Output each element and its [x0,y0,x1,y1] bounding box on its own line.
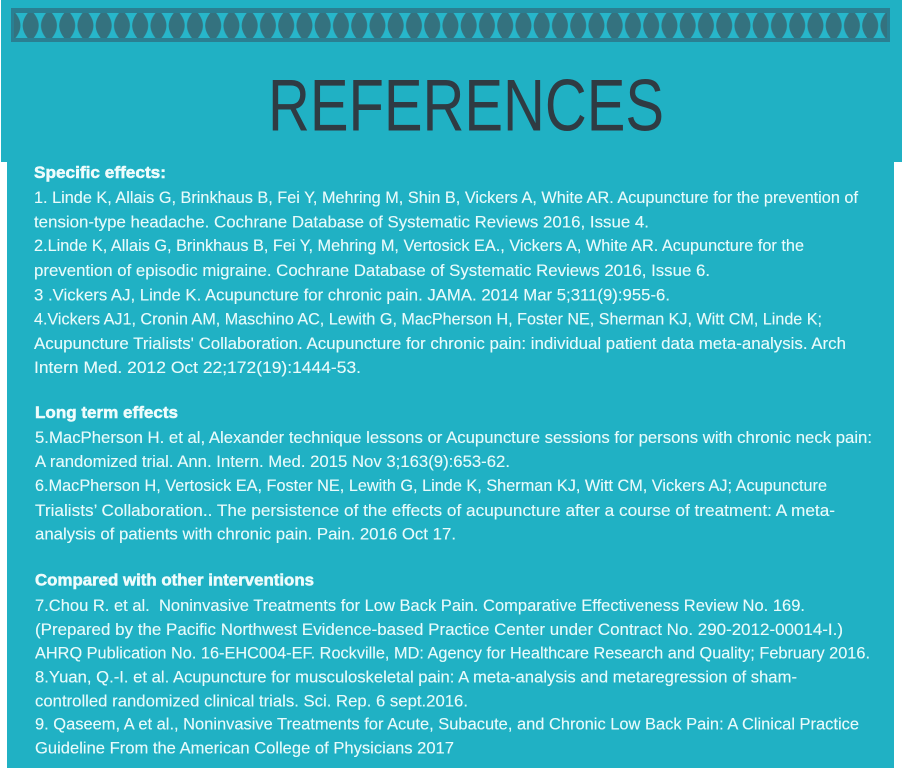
reference 3: 3 .Vickers AJ, Linde K. Acupuncture for chronic pain. JAMA. 2014 Mar 5;311(9):955-6. [34,286,670,304]
title: REFERENCES [268,66,664,146]
section: long term effects [35,404,872,544]
reference 4: Acupuncture Trialists' Collaboration. Acupuncture for chronic pain: individual patient data meta-analysis. Arch [34,334,846,353]
reference 7: 7.Chou R. et al. Noninvasive Treatments for Low Back Pain. Comparative Effectiveness Review No. 169. [35,596,805,615]
reference 9 [35,714,859,758]
reference 2 [34,236,804,280]
section: compared with other interventions [35,572,870,758]
heading: long term effects: Long term effects [35,404,178,422]
reference 2: 2.Linde K, Allais G, Brinkhaus B, Fei Y, Mehring M, Vertosick EA., Vickers A, White AR. Acupuncture for the [34,236,804,255]
reference 1: tension-type headache. Cochrane Database of Systematic Reviews 2016, Issue 4. [34,212,649,232]
reference 9: 9. Qaseem, A et al., Noninvasive Treatments for Acute, Subacute, and Chronic Low Back Pain: A Clinical Practice [35,714,859,734]
reference 5 [35,428,872,471]
reference 4: 4.Vickers AJ1, Cronin AM, Maschino AC, Lewith G, MacPherson H, Foster NE, Sherman KJ, Witt CM, Linde K; [34,310,822,328]
reference 2: prevention of episodic migraine. Cochrane Database of Systematic Reviews 2016, Issue 6. [34,261,710,280]
reference 6: Trialists’ Collaboration.. The persistence of the effects of acupuncture after a course of treatment: A meta- [35,501,835,520]
reference 4 [34,310,846,377]
reference 5: 5.MacPherson H. et al, Alexander technique lessons or Acupuncture sessions for persons with chronic neck pain: [35,428,872,447]
reference 7: (Prepared by the Pacific Northwest Evidence-based Practice Center under Contract No. 290-2012-00014-I.) [35,620,843,639]
decorative band [11,8,890,42]
reference 7 [35,596,870,662]
reference 8: 8.Yuan, Q.-I. et al. Acupuncture for musculoskeletal pain: A meta-analysis and metaregression of sham- [35,668,797,686]
reference 5: A randomized trial. Ann. Intern. Med. 2015 Nov 3;163(9):653-62. [35,452,510,471]
reference 9: Guideline From the American College of Physicians 2017 [35,738,454,758]
heading: compared with other interventions: Compared with other interventions [35,572,314,590]
reference 8 [35,668,797,710]
reference 6: analysis of patients with chronic pain. Pain. 2016 Oct 17. [35,524,456,544]
reference 6: 6.MacPherson H, Vertosick EA, Foster NE, Lewith G, Linde K, Sherman KJ, Witt CM, Vickers AJ; Acupuncture [35,476,827,495]
heading: specific effects: Specific effects: [34,164,166,182]
reference 7: AHRQ Publication No. 16-EHC004-EF. Rockville, MD: Agency for Healthcare Research and Quality; February 2016. [35,644,870,662]
section: specific effects [34,164,858,377]
reference 6 [35,476,835,544]
reference 4: Intern Med. 2012 Oct 22;172(19):1444-53. [34,358,361,377]
reference 1: 1. Linde K, Allais G, Brinkhaus B, Fei Y, Mehring M, Shin B, Vickers A, White AR. Acupuncture for the prevention of [34,188,858,207]
reference 1 [34,188,858,232]
reference 8: controlled randomized clinical trials. Sci. Rep. 6 sept.2016. [35,692,468,710]
